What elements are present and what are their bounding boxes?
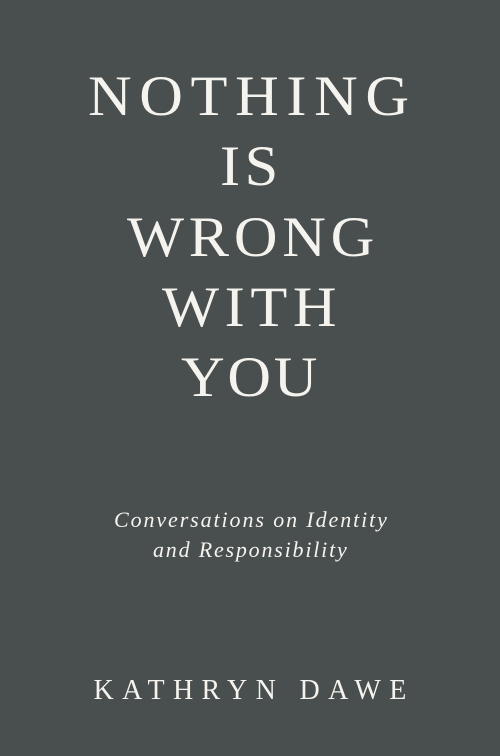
title: WRONG bbox=[127, 206, 379, 269]
subtitle: and Responsibility bbox=[153, 537, 349, 562]
title: WITH bbox=[162, 276, 342, 339]
title: NOTHING bbox=[88, 65, 417, 128]
title: IS bbox=[220, 135, 283, 198]
title bbox=[88, 65, 417, 409]
subtitle bbox=[114, 507, 389, 562]
title: YOU bbox=[181, 346, 320, 409]
author: KATHRYN DAWE bbox=[94, 675, 415, 706]
subtitle: Conversations on Identity bbox=[114, 507, 389, 532]
